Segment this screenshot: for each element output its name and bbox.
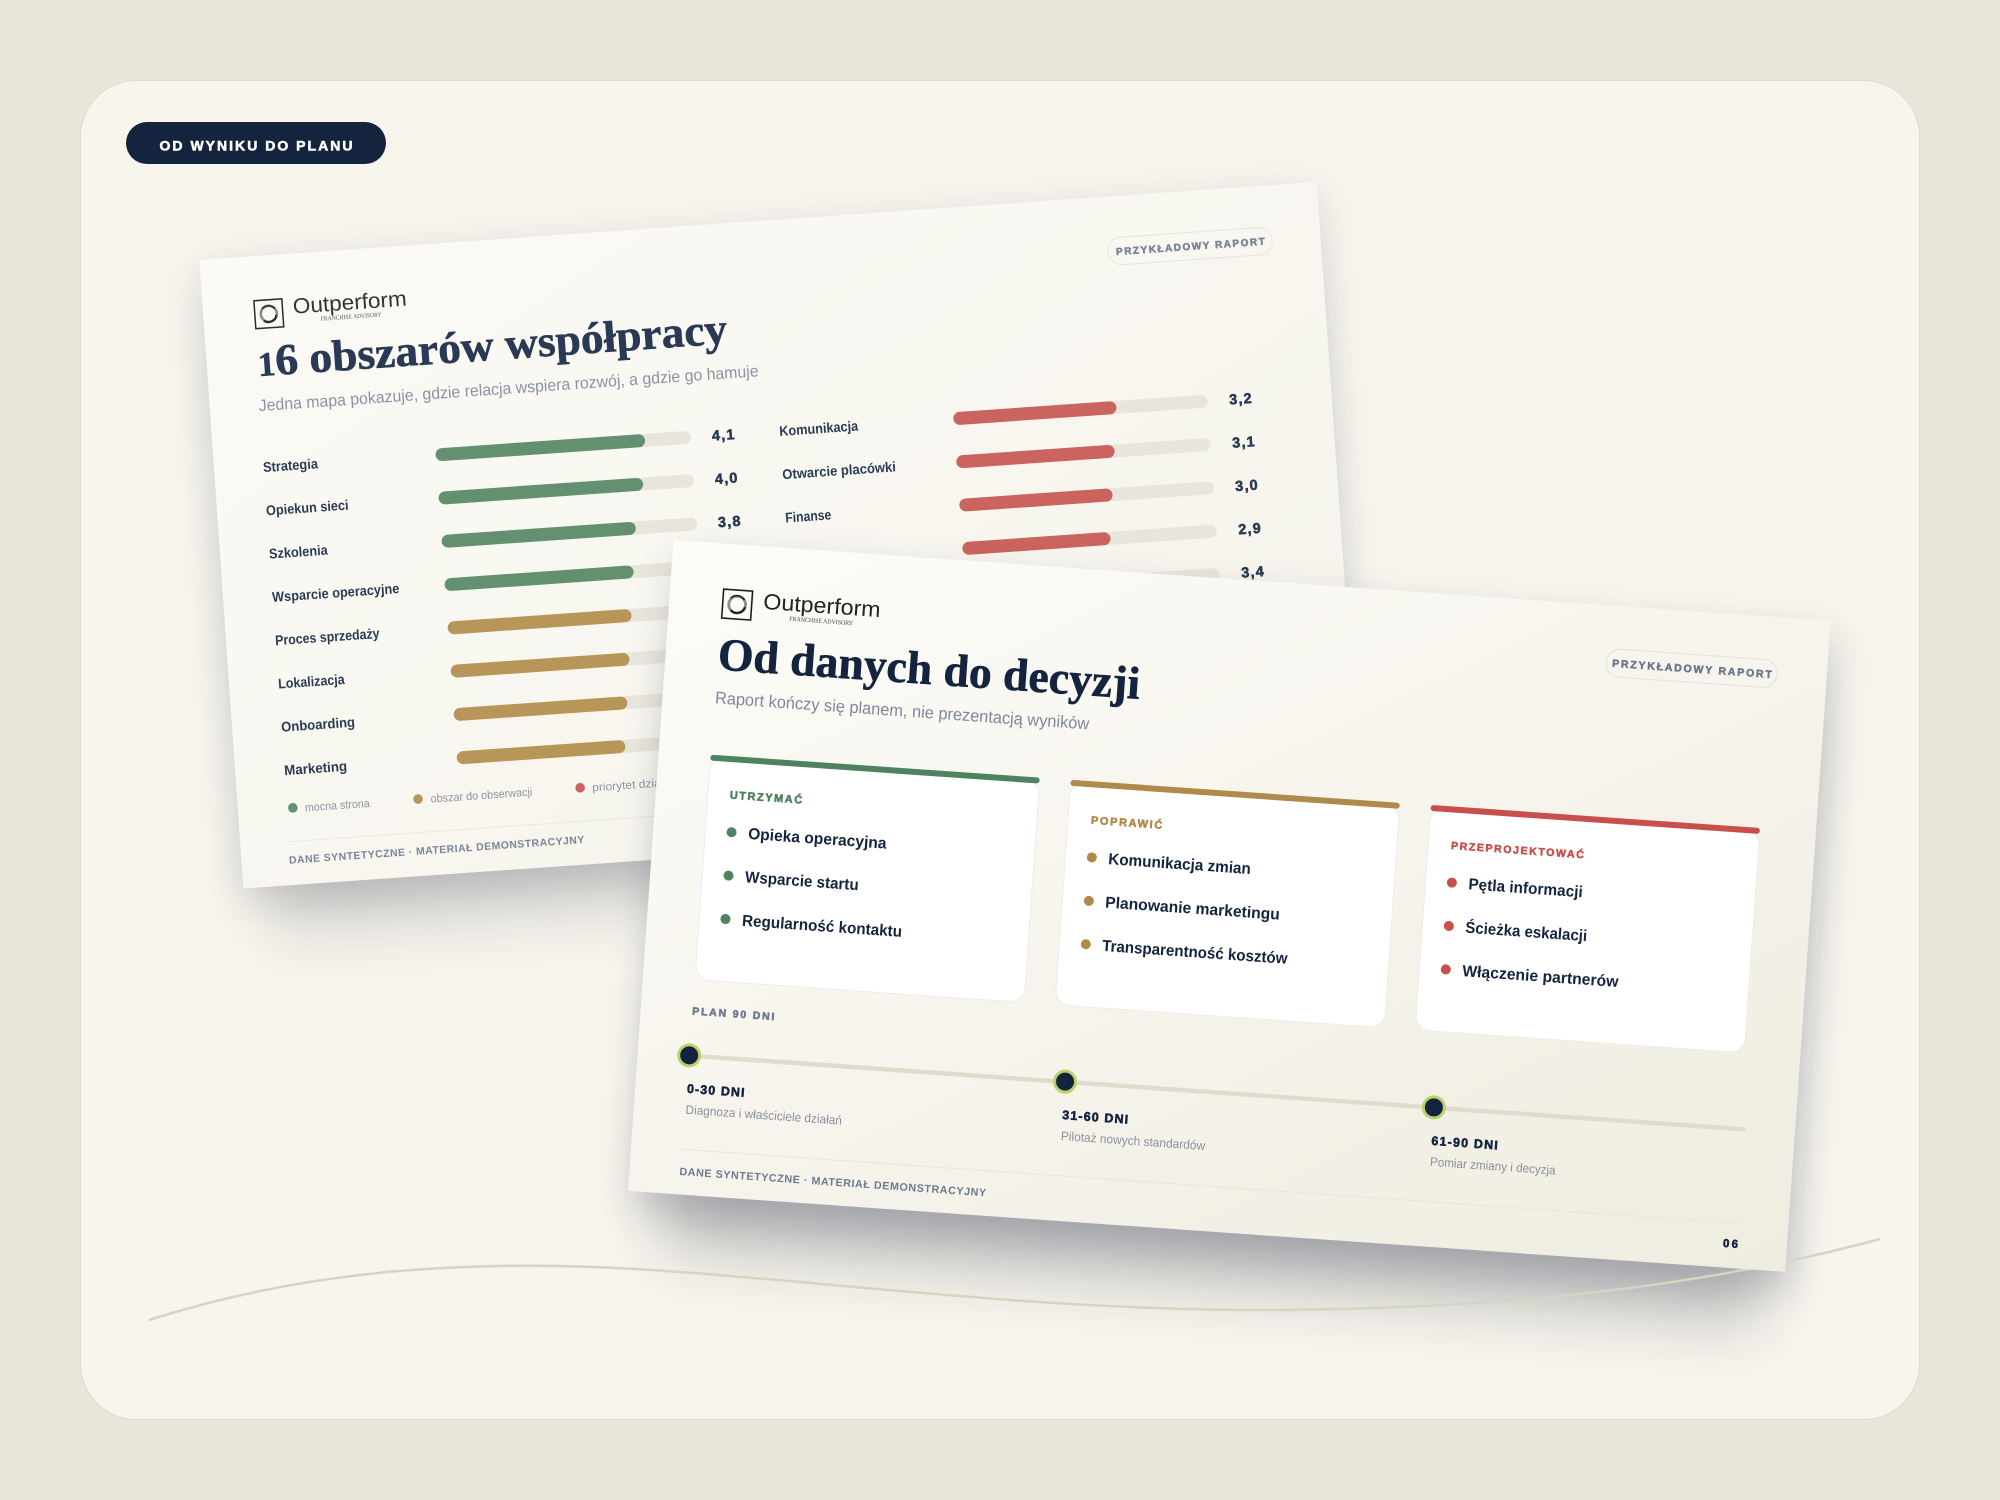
card: utrzymać bbox=[695, 755, 1040, 1003]
badge: przykladowy raport: PRZYKŁADOWY RAPORT bbox=[1116, 237, 1265, 258]
row: Otwarcie placówki: Otwarcie placówki bbox=[782, 458, 896, 482]
subtitle: Jedna mapa pokazuje, gdzie relacja wspiera rozwój, a gdzie go hamuje bbox=[258, 362, 759, 415]
subtitle: Raport kończy się planem, nie prezentacją wyników bbox=[714, 688, 1091, 733]
row: Finanse bbox=[785, 477, 1258, 527]
card: poprawić: Komunikacja zmian bbox=[1108, 851, 1251, 878]
row: Szkolenia bbox=[268, 513, 741, 563]
milestone: 0-30 dni: 0-30 DNI bbox=[687, 1082, 745, 1100]
row: value 3,4 bbox=[965, 564, 1264, 601]
page number: 06 bbox=[1723, 1238, 1738, 1251]
row: Otwarcie placówki bbox=[782, 433, 1255, 483]
card: przeprojektować: PRZEPROJEKTOWAĆ bbox=[1451, 839, 1585, 861]
timeline bbox=[674, 1044, 1746, 1191]
legend: priorytet działania bbox=[592, 776, 687, 794]
card: poprawić: Transparentność kosztów bbox=[1102, 938, 1289, 968]
milestone: 0-30 dni bbox=[674, 1044, 846, 1128]
milestone: 31-60 dni: 31-60 DNI bbox=[1062, 1108, 1129, 1127]
row: value 3,4: 3,4 bbox=[1241, 564, 1264, 582]
milestone: 31-60 dni: Pilotaż nowych standardów bbox=[1060, 1129, 1207, 1153]
row: Proces sprzedaży bbox=[275, 602, 704, 648]
row: Lokalizacja bbox=[278, 646, 707, 692]
logo: Outperform: Outperform bbox=[292, 287, 407, 319]
panel: back slide, 16 areas bbox=[199, 182, 1361, 888]
card: utrzymać: Regularność kontaktu bbox=[741, 913, 903, 941]
milestone: 0-30 dni: Diagnoza i właściciele działań bbox=[685, 1103, 842, 1128]
milestone: 61-90 dni: Pomiar zmiany i decyzja bbox=[1429, 1155, 1556, 1178]
decorative curve bbox=[149, 1239, 1880, 1320]
legend: obszar do obserwacji bbox=[430, 787, 533, 806]
milestone: 61-90 dni bbox=[1419, 1096, 1560, 1178]
row: Komunikacja bbox=[779, 390, 1252, 440]
panel: front slide, data to decisions bbox=[628, 540, 1831, 1272]
badge: przykladowy raport bbox=[1107, 227, 1273, 266]
row: Onboarding bbox=[281, 689, 710, 735]
row: Opiekun sieci: Opiekun sieci bbox=[265, 497, 349, 518]
badge: od wyniku do planu: OD WYNIKU DO PLANU bbox=[160, 138, 352, 154]
row: value 2,9: 2,9 bbox=[1238, 521, 1261, 538]
row: Finanse: 3,0 bbox=[1235, 478, 1258, 495]
legend bbox=[288, 776, 687, 816]
card: utrzymać: Wsparcie startu bbox=[745, 869, 859, 894]
row: Komunikacja: 3,2 bbox=[1229, 391, 1252, 408]
footer note: DANE SYNTETYCZNE · MATERIAŁ DEMONSTRACYJNY bbox=[289, 834, 585, 867]
row: Opiekun sieci bbox=[265, 469, 738, 519]
row: Wsparcie operacyjne bbox=[272, 559, 701, 605]
card: przeprojektować: Pętla informacji bbox=[1468, 876, 1583, 901]
legend: mocna strona bbox=[304, 798, 371, 814]
row: Szkolenia: Szkolenia bbox=[268, 542, 328, 562]
row: Strategia bbox=[262, 426, 735, 476]
badge: od wyniku do planu bbox=[126, 122, 386, 164]
row: Wsparcie operacyjne: Wsparcie operacyjne bbox=[272, 580, 400, 605]
shadow: front slide, soft edge bbox=[632, 558, 1835, 1290]
row: Marketing bbox=[284, 732, 713, 778]
row: Marketing: Marketing bbox=[284, 758, 348, 778]
row: Otwarcie placówki: 3,1 bbox=[1232, 434, 1255, 452]
shadow: front slide, deep drop bbox=[660, 628, 1801, 1325]
card: poprawić bbox=[1055, 780, 1400, 1028]
card: poprawić: Planowanie marketingu bbox=[1105, 895, 1280, 924]
row: Komunikacja: Komunikacja bbox=[779, 417, 859, 439]
logo: Outperform: FRANCHISE ADVISORY bbox=[321, 311, 382, 323]
row: Szkolenia: 3,8 bbox=[717, 514, 741, 531]
row: value 2,9 bbox=[962, 521, 1261, 558]
logo: Outperform bbox=[254, 287, 408, 329]
card: przeprojektować: Włączenie partnerów bbox=[1462, 963, 1619, 991]
bar chart: right column bbox=[779, 390, 1264, 613]
card: przeprojektować: Ścieżka eskalacji bbox=[1465, 918, 1588, 945]
footer note: DANE SYNTETYCZNE · MATERIAŁ DEMONSTRACYJNY bbox=[679, 1166, 987, 1199]
logo: Outperform: FRANCHISE ADVISORY bbox=[789, 616, 854, 627]
heading: plan 90 dni: PLAN 90 DNI bbox=[692, 1005, 775, 1023]
row: Strategia: Strategia bbox=[262, 455, 319, 475]
card: utrzymać: Opieka operacyjna bbox=[748, 826, 887, 853]
bar chart: left column bbox=[262, 426, 756, 778]
row: Strategia: 4,1 bbox=[711, 427, 735, 445]
title: 16 obszarów współpracy bbox=[256, 304, 729, 386]
title: Od danych do decyzji bbox=[716, 628, 1142, 709]
row: Proces sprzedaży: Proces sprzedaży bbox=[275, 625, 380, 648]
badge: przykladowy raport bbox=[1605, 648, 1778, 688]
row: Lokalizacja: Lokalizacja bbox=[278, 671, 345, 692]
shadow: back slide, soft edge bbox=[199, 194, 1361, 900]
row: Finanse: Finanse bbox=[785, 506, 832, 526]
card: poprawić: POPRAWIĆ bbox=[1091, 814, 1163, 832]
shadow: back slide, deep drop bbox=[231, 260, 1331, 932]
card: przeprojektować bbox=[1415, 805, 1760, 1053]
logo: Outperform: Outperform bbox=[763, 589, 882, 622]
row: Opiekun sieci: 4,0 bbox=[714, 470, 738, 488]
badge: przykladowy raport: PRZYKŁADOWY RAPORT bbox=[1612, 658, 1773, 681]
milestone: 61-90 dni: 61-90 DNI bbox=[1431, 1134, 1498, 1152]
row: Onboarding: Onboarding bbox=[281, 714, 355, 735]
milestone: 31-60 dni bbox=[1050, 1070, 1211, 1153]
logo: Outperform bbox=[722, 586, 882, 629]
card: utrzymać: UTRZYMAĆ bbox=[729, 789, 803, 807]
